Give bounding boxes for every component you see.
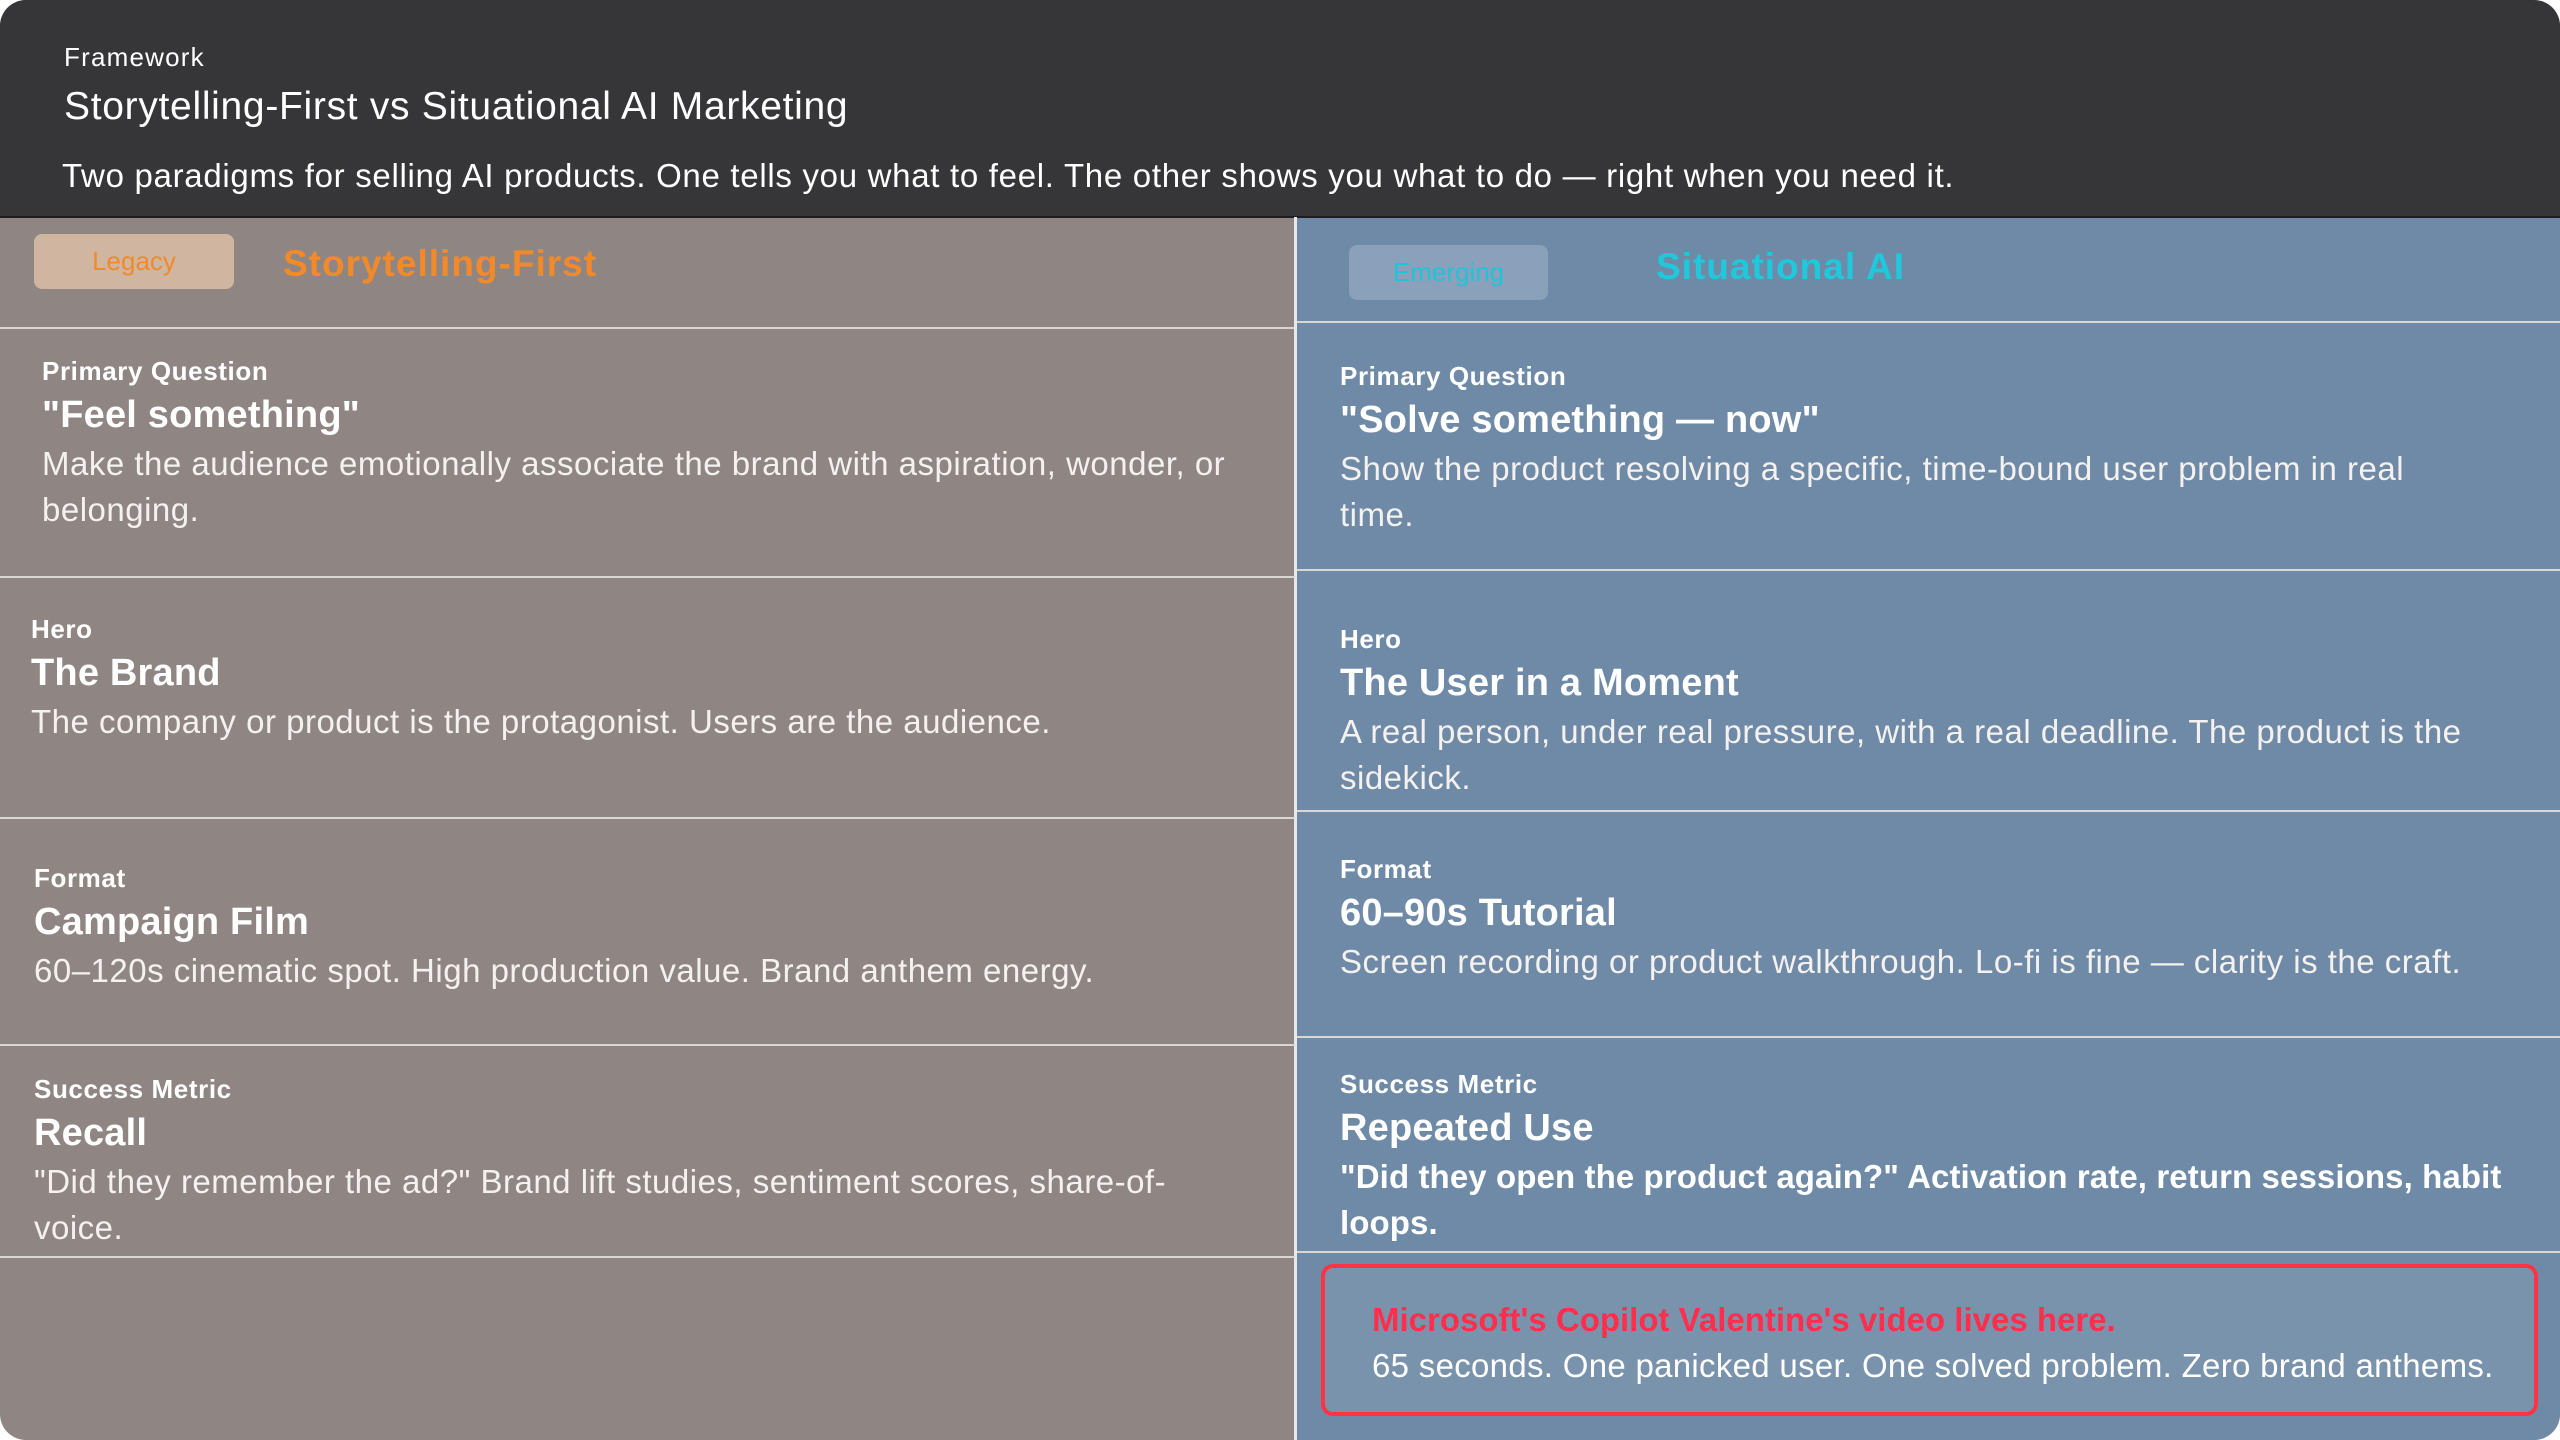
subtitle: Two paradigms for selling AI products. One tells you what to feel. The other shows you what to do — right when you need it. — [62, 157, 1954, 194]
left row: format: 60–120s cinematic spot. High production value. Brand anthem energy. — [34, 952, 1094, 989]
left row: hero — [31, 614, 1051, 740]
callout heading: Microsoft's Copilot Valentine's video lives here. — [1372, 1301, 2116, 1338]
callout body: 65 seconds. One panicked user. One solved problem. Zero brand anthems. — [1372, 1347, 2494, 1384]
left row: format — [34, 863, 1094, 989]
left row: format: Campaign Film — [34, 901, 309, 943]
right row: success metric: Repeated Use — [1340, 1107, 1594, 1149]
right column title: Situational AI — [1656, 246, 1905, 287]
right row: format: Screen recording or product walkthrough. Lo-fi is fine — clarity is the craft. — [1340, 943, 2461, 980]
left row: success metric: "Did they remember the ad?" Brand lift studies, sentiment scores, share-of-voice. — [34, 1163, 1166, 1246]
eyebrow: Framework — [64, 42, 205, 72]
badge: Emerging — [1349, 245, 1548, 300]
right row: hero: A real person, under real pressure, with a real deadline. The product is the sidekick. — [1340, 713, 2462, 796]
left row: primary question: "Feel something" — [42, 394, 360, 436]
right row: hero: Hero — [1340, 624, 1402, 654]
right row: success metric: "Did they open the product again?" Activation rate, return sessions, habit loops. — [1340, 1158, 2501, 1241]
right row: format: 60–90s Tutorial — [1340, 892, 1617, 934]
right row: format: Format — [1340, 854, 1432, 884]
right row: primary question — [1340, 361, 2404, 533]
left row: hero: The Brand — [31, 652, 221, 694]
left row: primary question — [42, 356, 1225, 528]
right row: success metric: Success Metric — [1340, 1069, 1538, 1099]
left row: success metric — [34, 1074, 1166, 1246]
panel: right column background — [1296, 217, 2560, 1440]
right row: primary question: Show the product resolving a specific, time-bound user problem in real time. — [1340, 450, 2404, 533]
badge: Emerging: Emerging — [1393, 257, 1504, 287]
header — [0, 0, 2560, 218]
left row: primary question: Primary Question — [42, 356, 268, 386]
left row: format: Format — [34, 863, 126, 893]
callout — [1321, 1264, 2538, 1416]
right row: primary question: Primary Question — [1340, 361, 1566, 391]
badge: Legacy — [34, 234, 234, 289]
left column title: Storytelling-First — [283, 243, 597, 284]
right row: primary question: "Solve something — now" — [1340, 399, 1820, 441]
left row: hero: Hero — [31, 614, 93, 644]
left row: hero: The company or product is the protagonist. Users are the audience. — [31, 703, 1051, 740]
right row: success metric — [1340, 1069, 2501, 1241]
left row: success metric: Success Metric — [34, 1074, 232, 1104]
right row: hero — [1340, 624, 2462, 796]
left row: success metric: Recall — [34, 1112, 147, 1154]
title: Storytelling-First vs Situational AI Marketing — [64, 85, 848, 128]
right row: hero: The User in a Moment — [1340, 662, 1739, 704]
badge: Legacy: Legacy — [92, 246, 176, 276]
left row: primary question: Make the audience emotionally associate the brand with aspiration, wonder, or belonging. — [42, 445, 1225, 528]
right row: format — [1340, 854, 2461, 980]
column divider — [1294, 217, 1297, 1440]
